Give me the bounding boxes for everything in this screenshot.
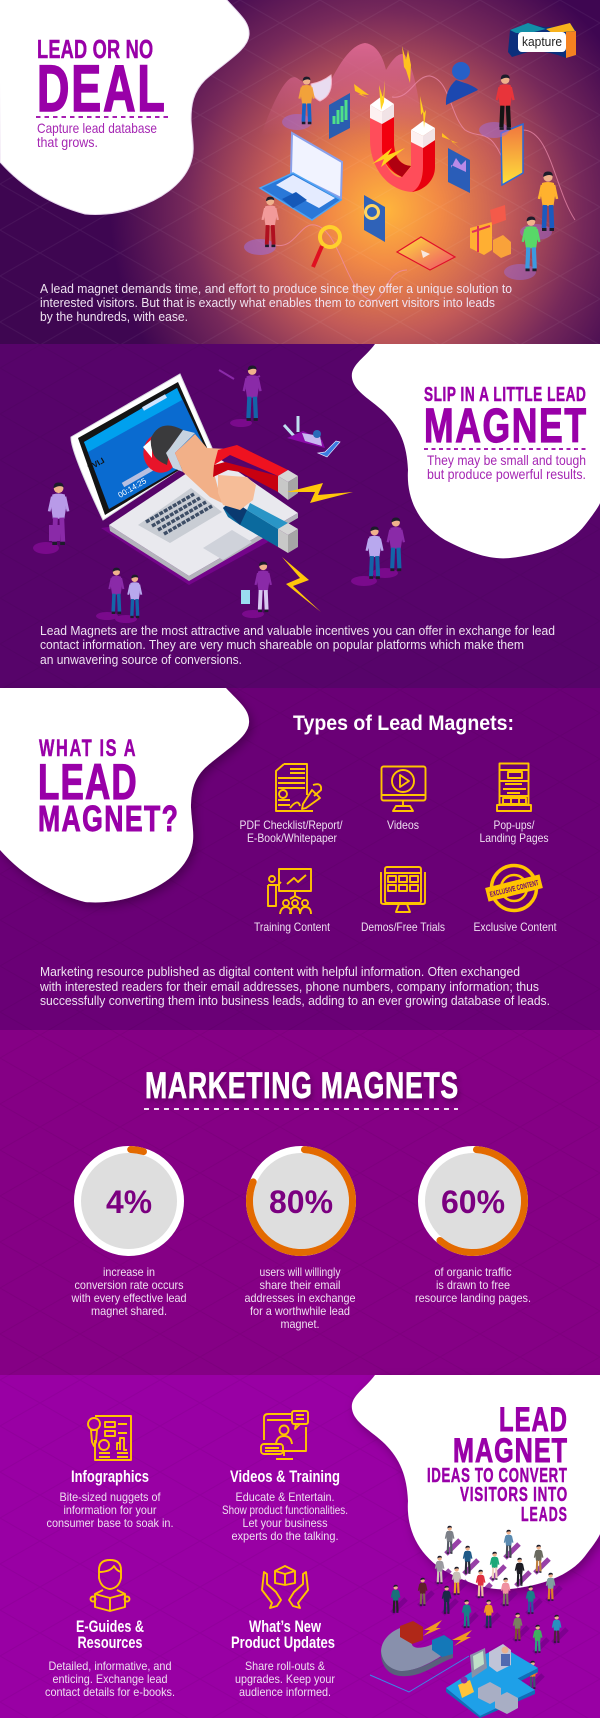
idea: product updates: Product Updates — [231, 1633, 335, 1652]
subtitle: Capture lead database — [37, 120, 157, 136]
label: with every effective lead — [71, 1291, 186, 1305]
laptop with hand and magnet — [71, 374, 298, 585]
idea: e-guides — [45, 1560, 175, 1699]
subheading — [427, 452, 586, 482]
video tablet — [397, 237, 455, 270]
label — [415, 1265, 531, 1305]
label: magnet. — [280, 1317, 320, 1331]
icon: landing page — [497, 764, 531, 811]
panel: lead or no deal — [0, 0, 600, 345]
label: for a worthwhile lead — [250, 1304, 350, 1318]
description — [46, 1490, 174, 1530]
description: audience informed. — [239, 1685, 331, 1699]
gift boxes — [470, 205, 511, 258]
description: Educate & Entertain. — [236, 1490, 334, 1504]
idea: videos and training — [222, 1411, 348, 1543]
type: popups — [480, 764, 548, 845]
heading: WHAT IS A — [39, 735, 136, 762]
people — [33, 366, 404, 623]
icon: hands with box — [262, 1566, 308, 1608]
type: popups: Landing Pages — [480, 831, 548, 845]
paragraph: Lead Magnets are the most attractive and valuable incentives you can offer in exchange for lead — [40, 623, 555, 638]
description: Bite-sized nuggets of — [60, 1490, 161, 1504]
idea: infographics — [46, 1416, 174, 1530]
label: increase in — [103, 1265, 155, 1279]
panel: marketing magnets — [0, 1030, 600, 1375]
label: conversion rate occurs — [74, 1278, 184, 1292]
type: demos — [361, 867, 445, 934]
heading: MAGNET — [453, 1432, 567, 1470]
intro paragraph: by the hundreds, with ease. — [40, 309, 188, 324]
label: of organic traffic — [434, 1265, 512, 1279]
description: Share roll-outs & — [245, 1659, 325, 1673]
type: exclusive: Exclusive Content — [474, 920, 557, 934]
description: enticing. Exchange lead — [52, 1672, 168, 1686]
panel: lead magnet ideas — [0, 1375, 600, 1718]
heading: VISITORS INTO — [460, 1483, 567, 1506]
grey magnet — [370, 1620, 472, 1692]
icon: reader — [90, 1560, 130, 1611]
blob with heading — [352, 1375, 600, 1589]
paragraph — [39, 964, 550, 1008]
description: consumer base to soak in. — [46, 1516, 174, 1530]
logo: kapture — [508, 23, 576, 58]
blob with heading — [0, 688, 249, 902]
heading: MAGNET — [424, 399, 586, 452]
description: upgrades. Keep your — [235, 1672, 335, 1686]
idea: e-guides: Resources — [78, 1633, 142, 1652]
label: resource landing pages. — [415, 1291, 531, 1305]
laptop — [260, 133, 342, 220]
type: pdf: PDF Checklist/Report/ — [240, 818, 343, 832]
stat: 4% — [71, 1148, 186, 1318]
shield — [311, 75, 332, 101]
type: training — [254, 869, 331, 934]
lightning bolts — [282, 483, 353, 612]
label: magnet shared. — [91, 1304, 167, 1318]
description — [222, 1490, 348, 1543]
idea: product updates — [231, 1566, 335, 1699]
type: pdf — [240, 764, 343, 845]
label: addresses in exchange — [244, 1291, 356, 1305]
label: is drawn to free — [436, 1278, 510, 1292]
icon: video training — [261, 1411, 308, 1459]
intro paragraph: interested visitors. But that is exactly what enables them to convert visitors into leads — [40, 295, 495, 310]
heading: MARKETING MAGNETS — [145, 1065, 458, 1106]
panel: what is a lead magnet — [0, 688, 600, 1030]
wavy connector lines — [275, 76, 575, 300]
icon: stamp: EXCLUSIVE CONTENT — [489, 878, 540, 899]
horseshoe magnet — [354, 46, 462, 192]
idea: product updates: What’s New — [249, 1617, 322, 1636]
type: pdf: E-Book/Whitepaper — [247, 831, 337, 845]
icon: document — [276, 764, 321, 811]
description: Show product functionalities. — [222, 1503, 348, 1517]
icon: infographic — [88, 1416, 131, 1460]
subtitle — [37, 120, 157, 150]
logo: kapture: kapture — [522, 35, 562, 49]
description: Detailed, informative, and — [48, 1659, 172, 1673]
idea: e-guides: E-Guides & — [76, 1617, 144, 1636]
heading: IDEAS TO CONVERT — [427, 1464, 567, 1487]
heading — [427, 1401, 567, 1526]
type: popups: Pop-ups/ — [494, 818, 535, 832]
heading: MAGNET? — [38, 798, 178, 839]
paragraph: successfully converting them into business leads, adding to an ever growing database of leads. — [40, 993, 550, 1008]
icon: presenter — [268, 869, 311, 914]
stat: 4%: 4% — [106, 1184, 152, 1220]
blob with title — [0, 0, 249, 214]
heading: LEAD — [38, 755, 137, 811]
blob with heading — [352, 344, 600, 558]
paragraph: with interested readers for their email addresses, phone numbers, company information; thus — [39, 979, 539, 994]
paragraph — [40, 623, 555, 667]
heading: LEAD — [499, 1401, 567, 1439]
types heading: Types of Lead Magnets: — [293, 712, 514, 735]
stat: 80% — [244, 1146, 356, 1331]
intro paragraph: A lead magnet demands time, and effort to produce since they offer a unique solution to — [40, 281, 512, 296]
heading — [38, 735, 178, 839]
description: experts do the talking. — [232, 1529, 338, 1543]
laptop with hand and magnet: LIVE — [86, 456, 106, 473]
subtitle: that grows. — [37, 134, 98, 150]
icon: demo screen — [381, 867, 425, 912]
laptop with hand and magnet: 00:14:25 — [116, 476, 148, 500]
paragraph: an unwavering source of conversions. — [40, 652, 242, 667]
paragraph: contact information. They are very much shareable on popular platforms which make them — [40, 637, 524, 652]
idea: videos and training: Videos & Training — [230, 1467, 340, 1486]
data platforms — [446, 1644, 538, 1718]
label: share their email — [260, 1278, 340, 1292]
heading: LEADS — [521, 1503, 567, 1526]
magnifier — [313, 227, 340, 267]
chart panels — [329, 93, 470, 242]
label — [244, 1265, 356, 1331]
crowd of people — [391, 1526, 567, 1689]
type: videos: Videos — [387, 818, 419, 832]
panel: slip in a little lead magnet — [0, 344, 600, 688]
description: Let your business — [242, 1516, 328, 1530]
label: users will willingly — [260, 1265, 340, 1279]
description: information for your — [64, 1503, 156, 1517]
title: DEAL — [37, 51, 165, 125]
paragraph: Marketing resource published as digital content with helpful information. Often exchanged — [40, 964, 520, 979]
description — [235, 1659, 335, 1699]
title: LEAD OR NO — [37, 35, 153, 64]
description: contact details for e-books. — [45, 1685, 175, 1699]
heading: SLIP IN A LITTLE LEAD — [424, 383, 586, 406]
user icon — [446, 62, 478, 105]
type: training: Training Content — [254, 920, 331, 934]
mountains — [262, 43, 420, 135]
stat: 60% — [415, 1146, 531, 1305]
intro paragraph — [40, 281, 512, 324]
description — [45, 1659, 175, 1699]
people — [244, 75, 557, 280]
stat: 60%: 60% — [441, 1184, 505, 1220]
idea: infographics: Infographics — [71, 1467, 149, 1486]
type: videos — [382, 766, 426, 832]
icon: monitor — [382, 766, 426, 811]
type: exclusive — [474, 866, 557, 934]
type: demos: Demos/Free Trials — [361, 920, 445, 934]
stat: 80%: 80% — [269, 1184, 333, 1220]
phone — [501, 124, 523, 185]
label — [71, 1265, 186, 1318]
